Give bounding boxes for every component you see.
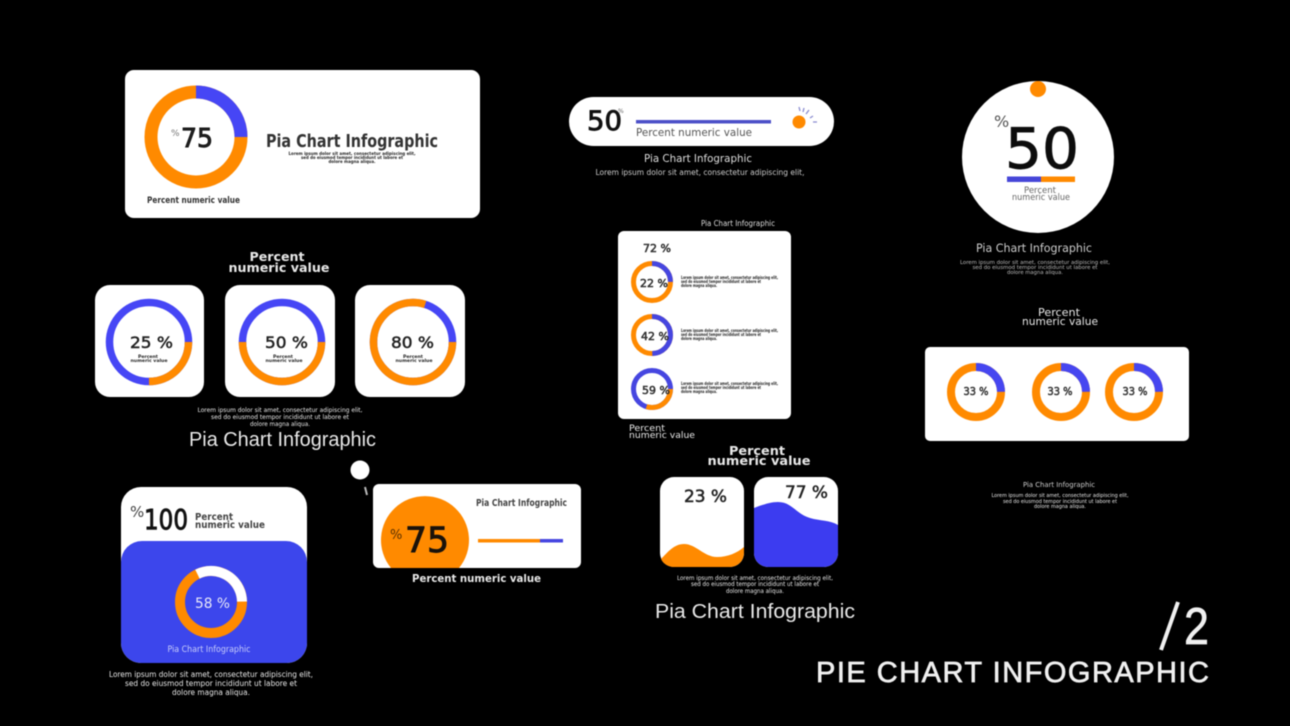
panel: 80 percent card (355, 285, 465, 397)
list panel caption: numeric value (629, 431, 695, 441)
caption: percent numeric value: Percent numeric value (412, 572, 541, 585)
value: 50 percent: 50 % (265, 333, 308, 352)
orange marker dot (1030, 81, 1046, 97)
circle description (960, 260, 1110, 276)
circle description: Lorem ipsum dolor sit amet, consectetur adipiscing elit, (960, 260, 1110, 266)
title: wave cards: Pia Chart Infographic (655, 601, 855, 623)
circle title: Pia Chart Infographic (976, 241, 1092, 255)
caption: numeric value (396, 358, 432, 364)
description: 33 percent panel: dolore magna aliqua. (1034, 504, 1086, 510)
progress bar (636, 120, 771, 124)
heading: percent numeric value, 33 percent panel: numeric value (1022, 316, 1098, 328)
caption: percent numeric value (195, 512, 265, 531)
donut row: 22 percent: sed do eiusmod tempor incididunt ut labore et (681, 279, 761, 284)
circle description: sed do eiusmod tempor incididunt ut labore et (972, 265, 1098, 271)
description: 33 percent panel: sed do eiusmod tempor incididunt ut labore et (1003, 499, 1118, 505)
donut row: 42 percent: 42 % (641, 330, 669, 343)
slide number (1161, 598, 1209, 656)
panel: 50 percent pill (569, 97, 834, 146)
value: 23 percent: 23 % (684, 487, 727, 506)
description under wave cards: sed do eiusmod tempor incididunt ut labore et (691, 581, 820, 588)
caption: numeric value (1012, 193, 1070, 203)
title: three cards: Pia Chart Infographic (189, 429, 376, 451)
value: 25 percent: 25 % (130, 333, 173, 352)
donut chart: 75 percent (151, 92, 241, 182)
description under three cards (198, 407, 363, 428)
value: 100 percent: 100 (144, 503, 188, 536)
donut row: 22 percent: Lorem ipsum dolor sit amet, consectetur adipiscing elit, (681, 275, 778, 280)
description under wave cards: Lorem ipsum dolor sit amet, consectetur adipiscing elit, (677, 575, 833, 582)
description under blue card: Lorem ipsum dolor sit amet, consectetur adipiscing elit, (109, 670, 313, 679)
caption (266, 354, 302, 364)
donut chart: first 33 percent: 33 % (964, 386, 989, 398)
donut chart: first 33 percent (951, 367, 1001, 417)
card description: sed do eiusmod tempor incididunt ut labore et (301, 155, 404, 161)
donut chart: 50 percent (242, 302, 322, 382)
caption (396, 354, 432, 364)
description under three cards: Lorem ipsum dolor sit amet, consectetur adipiscing elit, (198, 407, 363, 414)
caption: Percent (403, 354, 424, 360)
donut chart: second 33 percent (1036, 367, 1086, 417)
description under wave cards: dolore magna aliqua. (726, 588, 784, 595)
blue panel label: Pia Chart Infographic (168, 645, 251, 655)
donut row: 42 percent: dolore magna aliqua. (681, 336, 717, 341)
donut value: % (171, 129, 180, 139)
card description (288, 151, 416, 165)
donut row: 42 percent (634, 316, 778, 354)
pill description: Lorem ipsum dolor sit amet, consectetur adipiscing elit, (596, 168, 804, 177)
value: 75 percent: % (390, 528, 402, 543)
donut row: 59 percent (634, 370, 778, 408)
description: 33 percent panel: Lorem ipsum dolor sit amet, consectetur adipiscing elit, (992, 493, 1129, 499)
caption: percent numeric value: Percent (195, 512, 233, 523)
list panel title: Pia Chart Infographic (701, 219, 775, 228)
list panel caption: Percent (629, 424, 665, 434)
panel: 25 percent card (95, 285, 204, 397)
donut chart: third 33 percent: 33 % (1122, 386, 1148, 398)
card title: Pia Chart Infographic (266, 131, 438, 152)
panel: donut list (618, 231, 791, 419)
title: 33 percent panel: Pia Chart Infographic (1023, 481, 1095, 489)
caption: percent numeric value: numeric value (195, 520, 265, 531)
panel: 77 percent wave card (754, 477, 838, 567)
donut row: 42 percent: Lorem ipsum dolor sit amet, consectetur adipiscing elit, (681, 328, 778, 333)
donut row: 59 percent: sed do eiusmod tempor incididunt ut labore et (681, 385, 761, 390)
donut chart: 58 percent (170, 561, 252, 643)
icon: white dot with tick (350, 460, 370, 495)
slide number: 2 (1184, 598, 1209, 656)
donut row: 22 percent: dolore magna aliqua. (681, 283, 717, 288)
heading: percent numeric value, three cards: numeric value (228, 260, 330, 275)
card description: dolore magna aliqua. (328, 159, 376, 165)
heading: percent numeric value, three cards: Percent (250, 249, 305, 264)
value: 100 percent: % (130, 503, 144, 521)
pill title: Pia Chart Infographic (644, 153, 752, 165)
value: 77 percent: 77 % (785, 483, 828, 502)
donut chart: 80 percent (374, 302, 452, 382)
caption: numeric value (130, 358, 168, 364)
progress bar (478, 539, 563, 542)
description under blue card: sed do eiusmod tempor incididunt ut labore et (125, 679, 297, 688)
caption (1012, 186, 1070, 203)
donut row: 22 percent: 22 % (640, 277, 668, 290)
donut row: 59 percent: Lorem ipsum dolor sit amet, consectetur adipiscing elit, (681, 381, 778, 386)
panel: 100 percent and blue donut card (121, 487, 307, 663)
caption: Percent (1024, 186, 1057, 196)
value: 50 percent: % (994, 112, 1009, 131)
donut caption: Percent numeric value (147, 196, 240, 206)
panel: 75 percent donut card (125, 70, 480, 218)
heading: percent numeric value, wave cards: numeric value (708, 453, 810, 468)
main title: PIE CHART INFOGRAPHIC (816, 657, 1209, 689)
donut row: 22 percent (634, 264, 778, 300)
value: 75 percent: 75 (405, 521, 449, 561)
value: 50 percent: % (618, 108, 624, 115)
panel: 50 percent card (225, 285, 335, 397)
value: 58 percent: 58 % (195, 596, 230, 612)
donut chart: third 33 percent (1109, 367, 1159, 417)
blue wave (754, 502, 838, 567)
blue inner panel (121, 541, 307, 663)
circle description: dolore magna aliqua. (1007, 270, 1063, 276)
caption: Percent numeric value (636, 127, 752, 139)
description under blue card: dolore magna aliqua. (172, 688, 250, 697)
donut row: 59 percent: 59 % (642, 384, 670, 397)
heading: percent numeric value, 33 percent panel: Percent (1038, 307, 1080, 319)
donut value: 75 (181, 124, 213, 154)
card description: Lorem ipsum dolor sit amet, consectetur adipiscing elit, (288, 151, 416, 157)
value: 80 percent: 80 % (391, 333, 434, 352)
description under three cards: sed do eiusmod tempor incididunt ut labore et (211, 414, 350, 421)
heading: percent numeric value, three cards (228, 249, 330, 275)
caption: numeric value (266, 358, 302, 364)
value: 72 percent: 72 % (643, 242, 671, 255)
value: 100 percent (130, 503, 188, 536)
card title: Pia Chart Infographic (476, 498, 567, 509)
description under wave cards (677, 575, 833, 595)
panel: three 33 percent donuts (925, 347, 1189, 441)
caption: Percent (138, 354, 159, 360)
orange wave (661, 544, 744, 567)
progress bar (1007, 176, 1075, 182)
orange circle (381, 496, 469, 568)
list panel caption (629, 424, 695, 441)
heading: percent numeric value, wave cards: Percent (729, 443, 785, 458)
panel: orange 75 percent card (373, 484, 581, 568)
description under three cards: dolore magna aliqua. (250, 421, 310, 428)
panel: big 50 percent circle (962, 81, 1114, 233)
donut row: 59 percent: dolore magna aliqua. (681, 389, 717, 394)
description under blue card (109, 670, 313, 697)
description: 33 percent panel (992, 493, 1129, 510)
caption: Percent (273, 354, 294, 360)
heading: percent numeric value, 33 percent panel (1022, 307, 1098, 328)
heading: percent numeric value, wave cards (708, 443, 810, 468)
donut chart: second 33 percent: 33 % (1048, 386, 1073, 398)
value: 50 percent: 50 (1005, 117, 1079, 182)
donut row: 42 percent: sed do eiusmod tempor incididunt ut labore et (681, 332, 761, 337)
caption (130, 354, 168, 364)
panel: 23 percent wave card (660, 477, 744, 567)
donut chart: 25 percent (110, 302, 188, 382)
icon: orange dot with rays (792, 107, 817, 128)
value: 50 percent: 50 (587, 106, 622, 137)
